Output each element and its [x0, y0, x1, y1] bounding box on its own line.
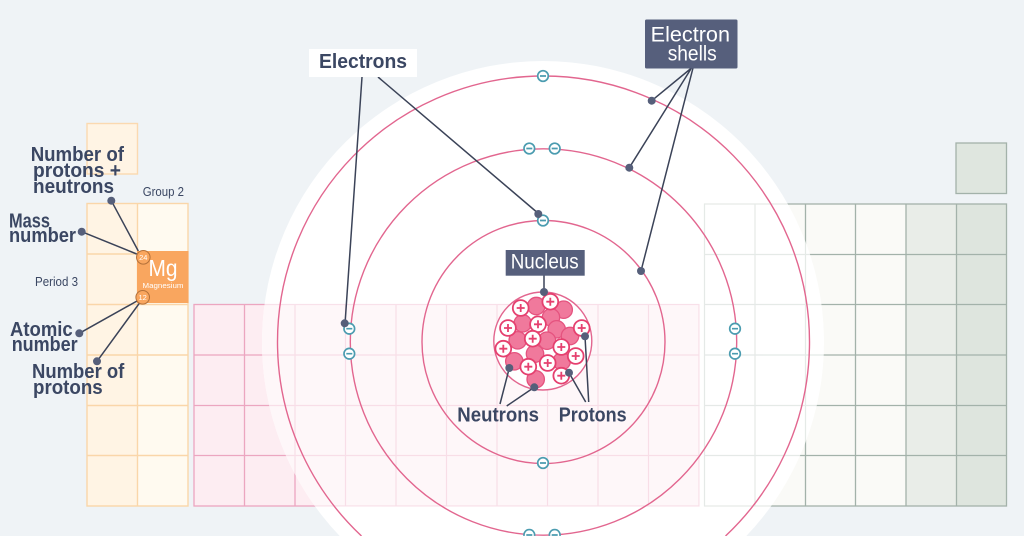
electron shells: [278, 76, 810, 536]
label: atomic number: [10, 319, 78, 356]
label: number of protons: [32, 361, 125, 399]
label: number of protons + neutrons: Number of: [31, 144, 124, 166]
label: mass number: [9, 210, 76, 247]
faded grid showing through the atom: [194, 204, 1006, 506]
label: number of protons + neutrons: [31, 144, 124, 198]
label: number of protons: Number of: [32, 361, 125, 383]
label: electrons: Electrons: [319, 51, 407, 73]
label: mass number: Mass: [9, 210, 50, 232]
electrons: [344, 71, 740, 536]
magnesium element cell: Mg: [148, 255, 178, 281]
neutrons: [506, 297, 579, 388]
periodic table: pink transition metals: [194, 304, 699, 506]
label: period 3: Period 3: [35, 275, 78, 289]
label: number of protons + neutrons: neutrons: [33, 176, 114, 198]
label: neutrons: Neutrons: [457, 405, 539, 427]
pointer lines: [79, 68, 693, 406]
label: atomic number: Atomic: [10, 319, 73, 341]
label: group 2: Group 2: [143, 185, 184, 199]
label: mass number: number: [9, 225, 76, 247]
label: number of protons: protons: [33, 377, 103, 399]
periodic table: orange groups 1 and 2: [87, 124, 188, 506]
periodic table: green non-metals: [704, 143, 1006, 506]
label: electron shells: Electron: [651, 24, 730, 47]
label: protons: Protons: [559, 405, 627, 427]
white atom backdrop: [262, 61, 824, 536]
atomic number badge: 12: [139, 293, 147, 302]
pointer dots: [75, 97, 656, 391]
magnesium element cell: [136, 250, 188, 304]
label: electron shells: shells: [668, 43, 717, 66]
label: number of protons + neutrons: protons +: [33, 160, 121, 182]
label: electrons: [309, 49, 417, 77]
label: nucleus: Nucleus: [511, 250, 579, 273]
nucleus: [494, 292, 592, 390]
protons: [495, 294, 590, 384]
magnesium element cell: Magnesium: [142, 281, 184, 290]
label: electron shells: [645, 20, 738, 68]
label: atomic number: number: [12, 334, 78, 356]
mass number badge: 24: [139, 253, 147, 262]
